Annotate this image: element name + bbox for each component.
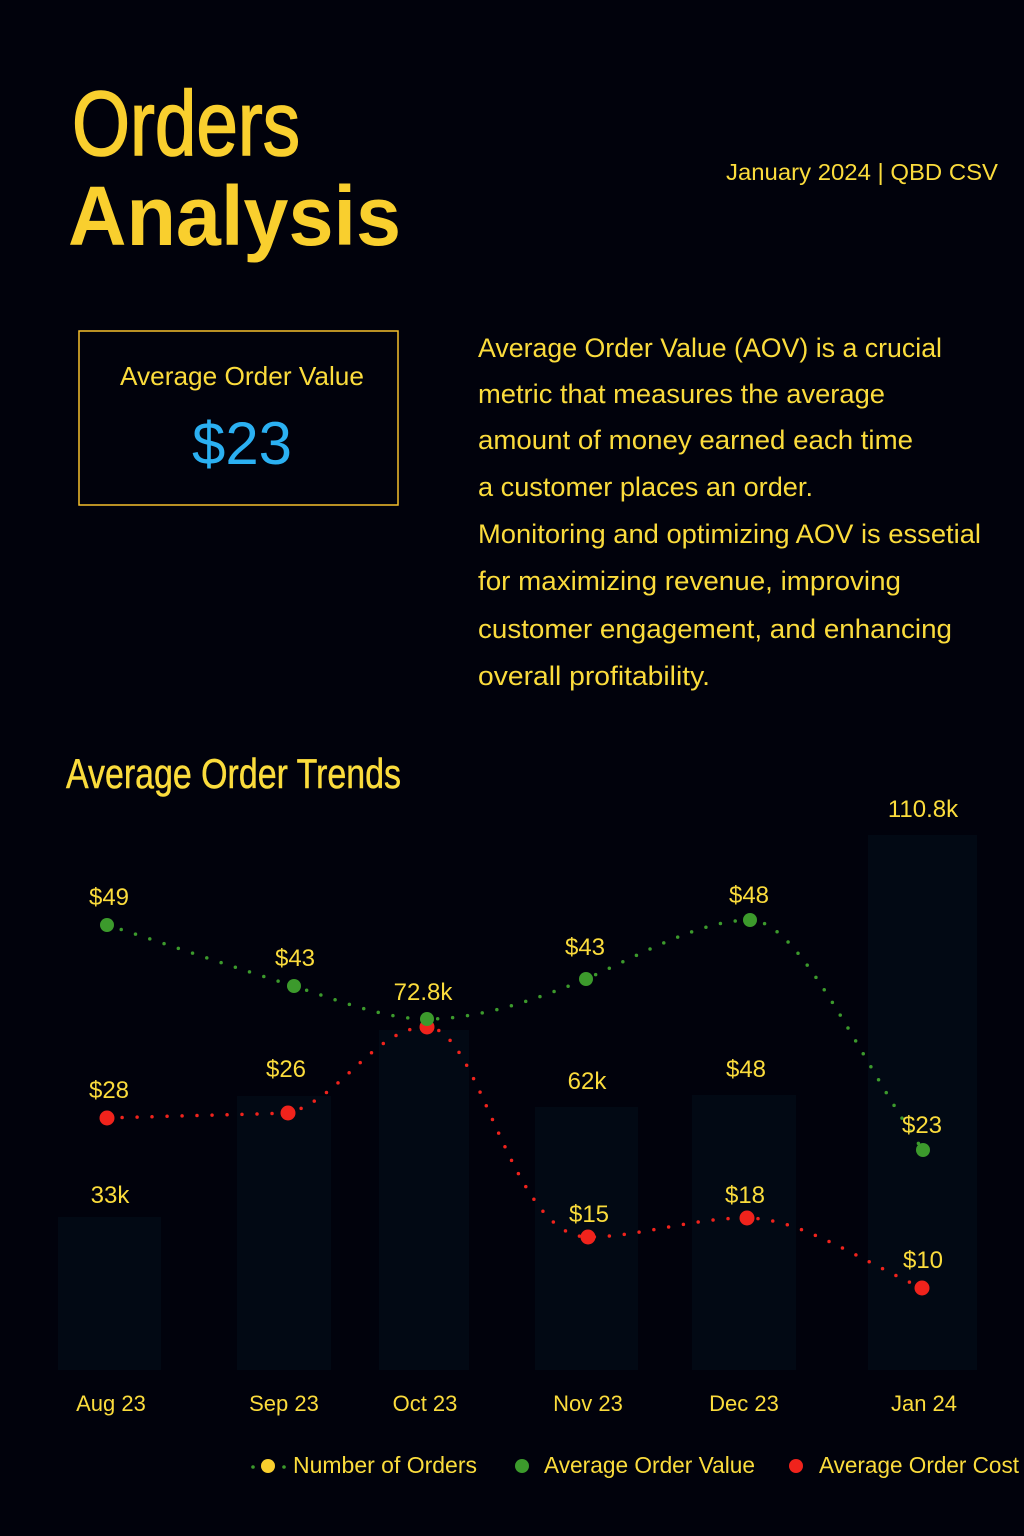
month axis labels: Nov 23 — [553, 1391, 623, 1416]
panel: average order value: $23 — [192, 410, 292, 477]
line: average order value — [100, 913, 930, 1157]
data labels: 62k — [568, 1068, 607, 1095]
data labels — [89, 796, 959, 1274]
legend — [251, 1452, 1020, 1478]
month axis labels: Aug 23 — [76, 1391, 146, 1416]
date and source label: January 2024 | QBD CSV — [726, 159, 999, 185]
title: Orders — [72, 73, 300, 175]
AOV description text: customer engagement, and enhancing — [478, 614, 952, 644]
bars: number of orders — [58, 835, 977, 1370]
AOV description text: metric that measures the average — [478, 379, 885, 409]
AOV description text: amount of money earned each time — [478, 425, 913, 455]
AOV description text: Monitoring and optimizing AOV is essetial — [478, 519, 981, 549]
month axis labels: Oct 23 — [393, 1391, 457, 1416]
data labels: $43 — [565, 934, 605, 961]
legend: average order value: Average Order Value — [544, 1452, 755, 1478]
AOV description text — [478, 333, 981, 691]
month axis labels: Dec 23 — [709, 1391, 779, 1416]
data labels: $18 — [725, 1182, 765, 1209]
data labels: $48 — [726, 1056, 766, 1083]
legend: number of orders: Number of Orders — [293, 1452, 477, 1478]
title: Analysis — [68, 169, 401, 263]
data labels: 33k — [91, 1182, 130, 1209]
data labels: $26 — [266, 1056, 306, 1083]
chart heading: Average Order Trends — [66, 750, 401, 797]
panel: average order value: Average Order Value — [120, 361, 364, 391]
line: average order cost — [100, 1012, 930, 1296]
data labels: $49 — [89, 884, 129, 911]
month axis labels: Jan 24 — [891, 1391, 957, 1416]
data labels: $10 — [903, 1247, 943, 1274]
month axis labels — [76, 1391, 957, 1416]
data labels: $28 — [89, 1077, 129, 1104]
data labels: $15 — [569, 1201, 609, 1228]
month axis labels: Sep 23 — [249, 1391, 319, 1416]
title — [68, 73, 401, 263]
data labels: $23 — [902, 1112, 942, 1139]
AOV description text: overall profitability. — [478, 661, 710, 691]
data labels: $48 — [729, 882, 769, 909]
data labels: $43 — [275, 945, 315, 972]
AOV description text: Average Order Value (AOV) is a crucial — [478, 333, 942, 363]
data labels: 110.8k — [888, 796, 959, 823]
AOV description text: a customer places an order. — [478, 472, 813, 502]
AOV description text: for maximizing revenue, improving — [478, 566, 901, 596]
chart: average order trends — [58, 796, 977, 1416]
panel: average order value — [79, 331, 398, 505]
data labels: 72.8k — [394, 979, 453, 1006]
legend: average order cost: Average Order Cost — [819, 1452, 1020, 1478]
